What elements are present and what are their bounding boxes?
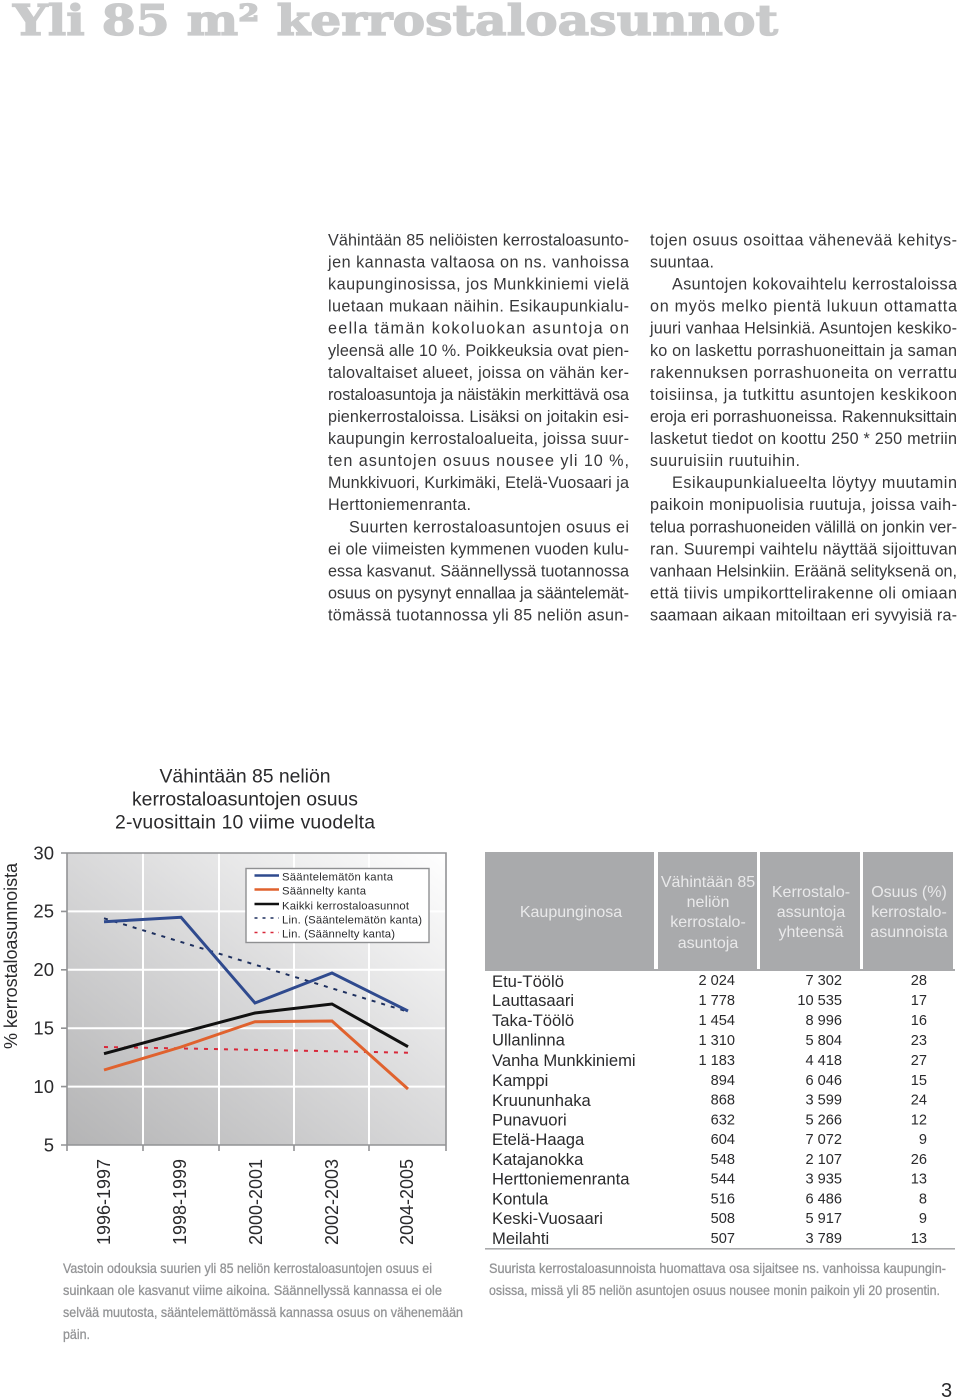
table: values: 13 <box>911 1231 927 1247</box>
series: Lin. Sääntelemätön kanta <box>104 918 408 1012</box>
text column: left: kaupungin kerrostaloalueita, joissa suur- <box>328 430 629 448</box>
table: values: 548 <box>711 1152 735 1168</box>
y axis labels: 30 <box>33 842 54 864</box>
table: values: 7 072 <box>805 1132 842 1148</box>
table: values: 544 <box>711 1172 735 1188</box>
table: values: 5 804 <box>805 1033 842 1049</box>
table: values: 868 <box>711 1092 735 1108</box>
table: values: 6 046 <box>805 1073 842 1089</box>
text column: right: tojen osuus osoittaa vähenevää kehitys- <box>650 232 957 250</box>
x axis labels <box>93 1159 417 1245</box>
table: values: 2 024 <box>698 973 735 989</box>
text column: left: Herttoniemenranta. <box>328 496 471 514</box>
text column: right: juuri vanhaa Helsinkiä. Asuntojen keskiko- <box>649 320 957 338</box>
y axis labels <box>33 842 54 1156</box>
x axis labels: 2000-2001 <box>245 1159 266 1245</box>
table: values: 9 <box>919 1132 927 1148</box>
table: values: 508 <box>711 1211 735 1227</box>
text column: left: yleensä alle 10 %. Poikkeuksia ovat pien- <box>328 342 629 360</box>
legend: Lin. (Sääntelemätön kanta) <box>282 914 422 926</box>
table: district names: Punavuori <box>492 1110 567 1130</box>
text column: right: vanhaan Helsinkiin. Eräänä selityksenä on, <box>650 562 957 580</box>
table header: asunnoista <box>870 924 948 941</box>
table: values: 1 310 <box>698 1033 735 1049</box>
text column: left: ei ole viimeisten kymmenen vuoden kulu- <box>328 540 629 558</box>
legend: Kaikki kerrostaloasunnot <box>282 900 410 912</box>
y axis labels: 10 <box>33 1076 54 1097</box>
table header: Kaupunginosa <box>520 904 622 921</box>
table header: neliön <box>687 894 729 911</box>
x axis labels: 2004-2005 <box>396 1159 417 1245</box>
text column: left: osuus on pysynyt ennallaa ja sääntelemät- <box>328 584 629 602</box>
table: values: 13 <box>911 1172 927 1188</box>
text column: right: paikoin monipuolisia ruutuja, joissa vaih- <box>650 496 957 514</box>
table: values: 3 935 <box>805 1172 842 1188</box>
table header <box>485 852 955 971</box>
text column: right: eroja eri porrashuoneissa. Rakennuksittain <box>650 408 957 426</box>
table: values: 604 <box>711 1132 735 1148</box>
text column: right: toisiinsa, ja tutkittu asuntojen keskikoon <box>650 386 957 404</box>
text column: left: kaupunginosissa, jos Munkkiniemi vielä <box>328 276 629 294</box>
text column: left: jen kannasta valtaosa on ns. vanhoissa <box>327 254 629 272</box>
table: values: 1 454 <box>698 1013 735 1029</box>
legend <box>246 868 429 942</box>
text column: right: on myös melko pientä lukuun ottamatta <box>650 298 957 316</box>
chart caption: selvää muutosta, sääntelemättömässä kannassa osuus on vähenemään <box>63 1304 463 1320</box>
table header: asuntoja <box>678 935 738 952</box>
text column: left: talovaltaiset alueet, joissa on vähän ker- <box>328 364 629 382</box>
table header: kerrostalo- <box>670 914 746 931</box>
series: Sääntelemätön kanta <box>104 917 408 1011</box>
table: values: 8 <box>919 1192 927 1208</box>
table: values: 9 <box>919 1211 927 1227</box>
line chart <box>1 842 446 1245</box>
table: district names: Katajanokka <box>492 1150 584 1169</box>
table: values: 894 <box>711 1073 735 1089</box>
table header: yhteensä <box>779 924 844 941</box>
chart caption: Vastoin odouksia suurien yli 85 neliön kerrostaloasuntojen osuus ei <box>63 1260 432 1276</box>
text column: right: Esikaupunkialueelta löytyy muutamin <box>672 474 957 492</box>
table: district names <box>492 972 636 1248</box>
table: values: 516 <box>711 1192 735 1208</box>
table header: kerrostalo- <box>871 904 947 921</box>
series: Kaikki kerrostaloasunnot <box>104 1004 408 1054</box>
table: district names: Meilahti <box>492 1229 549 1248</box>
text column: left: eella tämän kokoluokan asuntoja on <box>328 320 629 338</box>
table: values: 3 599 <box>805 1092 842 1108</box>
legend: Sääntelemätön kanta <box>282 872 394 884</box>
chart caption: suinkaan ole kasvanut viime aikoina. Säännellyssä kannassa ei ole <box>63 1282 442 1298</box>
series: Säännelty kanta <box>104 1021 408 1089</box>
table: district names: Etelä-Haaga <box>492 1130 585 1149</box>
table: values <box>698 973 927 1247</box>
table: values: 2 107 <box>805 1152 842 1168</box>
text column: right: rakennuksen porrashuoneita on verrattu <box>650 364 957 382</box>
table: district names: Lauttasaari <box>492 991 574 1010</box>
text column: left: essa kasvanut. Säännellyssä tuotannossa <box>328 562 629 580</box>
text column: right: ko on laskettu porrashuoneittain ja saman <box>650 342 957 360</box>
table: values: 15 <box>911 1073 927 1089</box>
text column: left <box>327 232 629 624</box>
table: district names: Ullanlinna <box>492 1030 566 1050</box>
table header: Osuus (%) <box>871 884 947 901</box>
table header: Vähintään 85 <box>661 874 755 891</box>
chart heading: kerrostaloasuntojen osuus <box>132 788 358 810</box>
table: values: 507 <box>711 1231 735 1247</box>
y axis labels: 25 <box>33 900 54 922</box>
series: Lin. Säännelty kanta <box>104 1047 408 1053</box>
text column: left: Munkkivuori, Kurkimäki, Etelä-Vuosaari ja <box>328 474 629 492</box>
chart heading <box>115 766 375 834</box>
table: values: 5 266 <box>805 1112 842 1128</box>
table: values: 8 996 <box>805 1013 842 1029</box>
chart caption: päin. <box>63 1326 90 1342</box>
text column: left: pienkerrostaloissa. Lisäksi on joitakin esi- <box>328 408 629 426</box>
table: district names: Kruununhaka <box>492 1091 591 1110</box>
text column: right: lasketut tiedot on koottu 250 * 250 metriin <box>650 430 957 448</box>
table: district names: Taka-Töölö <box>492 1011 574 1030</box>
text column: left: luetaan mukaan näihin. Esikaupunkialu- <box>328 298 629 316</box>
text column: right: suuruisiin ruutuihin. <box>650 452 800 470</box>
text column: left: Suurten kerrostaloasuntojen osuus ei <box>349 518 629 536</box>
text column: right: että tiivis umpikorttelirakenne oli omiaan <box>650 584 957 602</box>
table: district names: Etu-Töölö <box>492 972 564 991</box>
table: values: 23 <box>911 1033 927 1049</box>
y axis labels: 20 <box>33 959 54 980</box>
text column: left: ten asuntojen osuus nousee yli 10 %, <box>328 452 629 470</box>
text column: right: saamaan aikaan mitoiltaan eri syvyisiä ra- <box>650 606 957 624</box>
text column: left: Vähintään 85 neliöisten kerrostaloasunto- <box>328 232 629 250</box>
table: values: 1 778 <box>698 993 735 1009</box>
table: district names: Herttoniemenranta <box>492 1170 630 1188</box>
x axis labels: 1998-1999 <box>169 1159 190 1245</box>
y axis labels: 15 <box>33 1018 54 1038</box>
y axis title: % kerrostaloasunnoista <box>1 862 21 1049</box>
table: district names: Keski-Vuosaari <box>492 1209 603 1228</box>
table: values: 17 <box>911 993 927 1009</box>
table: values: 24 <box>911 1092 927 1108</box>
table: values: 10 535 <box>797 993 842 1009</box>
x axis labels: 2002-2003 <box>321 1159 342 1245</box>
table: values: 3 789 <box>805 1231 842 1247</box>
table: values: 6 486 <box>805 1192 842 1208</box>
table: district names: Vanha Munkkiniemi <box>492 1051 636 1070</box>
table header: assuntoja <box>777 904 845 921</box>
text column: right <box>649 232 957 624</box>
text column: right: Asuntojen kokovaihtelu kerrostaloissa <box>672 276 957 294</box>
table: values: 1 183 <box>698 1053 735 1069</box>
table: values: 28 <box>911 973 927 989</box>
table: values: 632 <box>711 1112 735 1128</box>
table: values: 7 302 <box>805 973 842 989</box>
table: values: 5 917 <box>805 1211 842 1227</box>
text column: left: tömässä tuotannossa yli 85 neliön asun- <box>328 606 629 624</box>
table: district names: Kontula <box>492 1190 549 1208</box>
x axis labels: 1996-1997 <box>93 1159 114 1245</box>
text column: right: telua porrashuoneiden välillä on jonkin ver- <box>650 518 957 536</box>
legend: Lin. (Säännelty kanta) <box>282 928 395 940</box>
table: district names: Kamppi <box>492 1071 548 1090</box>
table: values: 16 <box>911 1013 927 1029</box>
table: values: 12 <box>911 1112 927 1128</box>
legend: Säännelty kanta <box>282 886 367 898</box>
chart heading: Vähintään 85 neliön <box>160 766 330 788</box>
chart caption <box>63 1260 463 1342</box>
text column: right: suuntaa. <box>650 254 714 272</box>
table: values: 4 418 <box>805 1053 842 1069</box>
table: values: 26 <box>911 1152 927 1168</box>
text column: left: rostaloasuntoja ja näistäkin merkittävä osa <box>328 386 629 404</box>
table: values: 27 <box>911 1053 927 1069</box>
chart heading: 2-vuosittain 10 viime vuodelta <box>115 812 375 834</box>
table caption <box>489 1260 946 1298</box>
text column: right: ran. Suurempi vaihtelu näyttää sijoittuvan <box>650 540 957 558</box>
y axis labels: 5 <box>44 1134 54 1156</box>
table header: Kerrostalo- <box>772 884 850 901</box>
